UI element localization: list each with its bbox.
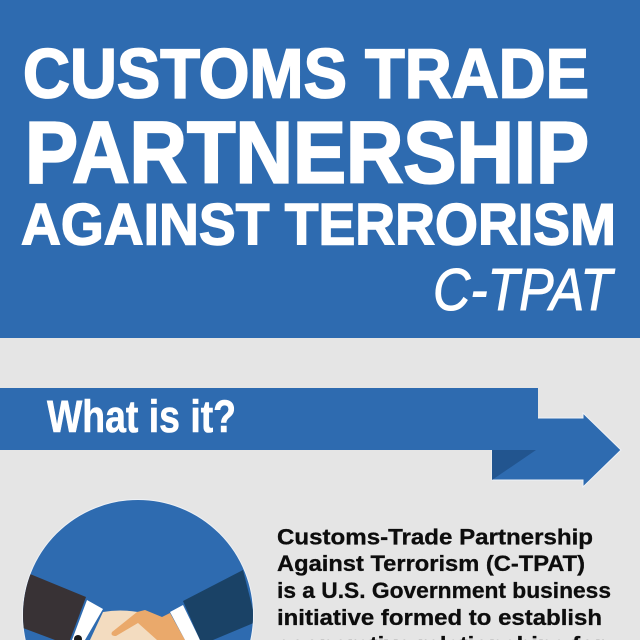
section heading: What is it?	[47, 391, 236, 442]
intro text block: Against Terrorism (C-TPAT)	[277, 551, 585, 576]
title line 1: CUSTOMS TRADE	[23, 34, 589, 112]
icon: handshake in circle	[20, 500, 256, 640]
title line 2: PARTNERSHIP	[25, 104, 589, 202]
section banner arrow	[0, 388, 621, 487]
subtitle: C-TPAT	[433, 257, 615, 323]
intro text block: Customs-Trade Partnership	[277, 524, 593, 550]
header panel	[0, 0, 640, 338]
intro text block: is a U.S. Government business	[277, 578, 611, 603]
title line 3: AGAINST TERRORISM	[21, 192, 616, 258]
intro text block: initiative formed to establish	[277, 605, 602, 630]
intro text block	[277, 524, 611, 640]
